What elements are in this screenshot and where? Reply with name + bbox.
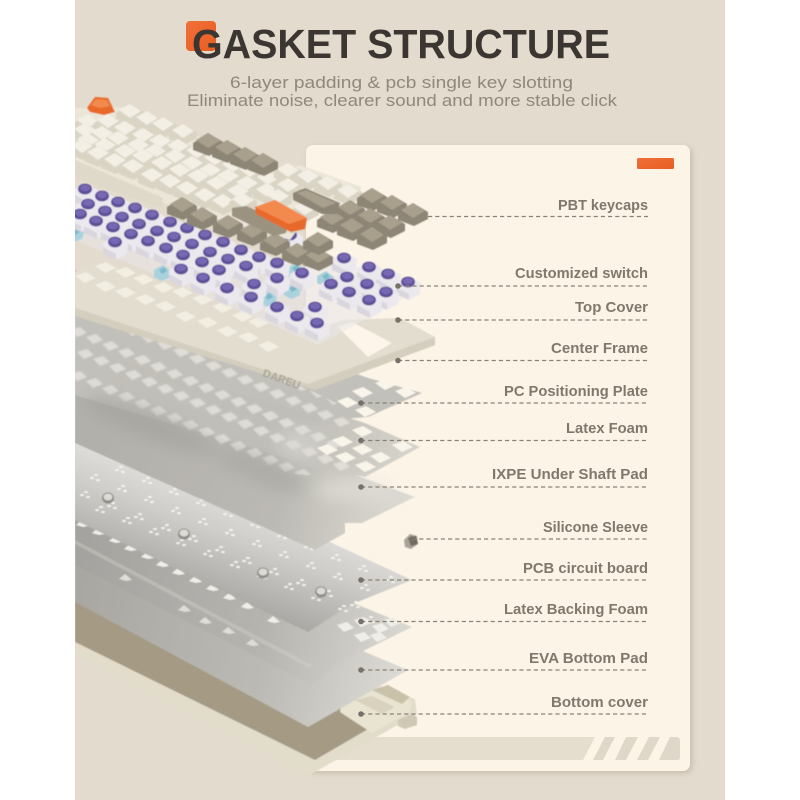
label: PCB circuit board: PCB circuit board [523, 560, 648, 577]
label: Top Cover: Top Cover [575, 299, 648, 316]
bottom stripe band [315, 737, 680, 760]
label: Latex Backing Foam: Latex Backing Foam [504, 601, 648, 618]
subtitle line 2: Eliminate noise, clearer sound and more stable click [187, 91, 618, 110]
panel: label card [306, 145, 690, 771]
subtitle line 1: 6-layer padding & pcb single key slotting [230, 73, 573, 92]
layer: customized switches [67, 183, 421, 345]
layer: PC positioning plate [75, 270, 422, 420]
label: Silicone Sleeve: Silicone Sleeve [543, 519, 648, 536]
layer: PCB circuit board [75, 443, 412, 632]
layer: latex backing foam [75, 520, 412, 652]
label: Top Cover [395, 299, 648, 323]
label: IXPE Under Shaft Pad: IXPE Under Shaft Pad [492, 466, 648, 483]
label: IXPE Under Shaft Pad [358, 466, 648, 490]
label: Latex Foam [358, 420, 648, 443]
long grey keys [232, 206, 288, 236]
label: Silicone Sleeve [409, 519, 648, 542]
label: Bottom cover [358, 694, 648, 717]
label: Bottom cover: Bottom cover [551, 694, 648, 711]
icon: silicone sleeve [404, 534, 418, 549]
layer: latex foam [75, 330, 420, 477]
plate blotches [91, 392, 376, 500]
icon: title orange square [186, 21, 216, 51]
plate square holes [75, 327, 350, 476]
plate bright right-end holes [317, 379, 416, 472]
label: Customized switch: Customized switch [515, 265, 648, 282]
label: PBT keycaps: PBT keycaps [558, 197, 648, 214]
label: EVA Bottom Pad: EVA Bottom Pad [529, 650, 648, 667]
label: EVA Bottom Pad [358, 650, 648, 673]
blue stabilizers [67, 226, 334, 307]
label: Center Frame [395, 340, 648, 363]
silicone sleeve sockets [102, 492, 327, 598]
label: Center Frame: Center Frame [551, 340, 648, 357]
title: GASKET STRUCTURE [192, 21, 610, 67]
layer: IXPE under shaft pad [75, 380, 415, 550]
label: PC Positioning Plate: PC Positioning Plate [504, 383, 648, 400]
layer: bottom cover [75, 600, 417, 776]
label: Latex Backing Foam [358, 601, 648, 624]
layer: EVA bottom pad [75, 565, 407, 728]
orange tag [637, 158, 674, 169]
label: PC Positioning Plate [358, 383, 648, 406]
orange keys [255, 200, 307, 232]
exploded keyboard illustration [67, 97, 435, 776]
label: PCB circuit board [358, 560, 648, 583]
layer: PBT keycaps [68, 97, 428, 271]
label: Customized switch [395, 265, 648, 289]
layer: center frame and top cover [75, 262, 435, 392]
frame logo: DAREU [261, 368, 302, 392]
label: Latex Foam: Latex Foam [566, 420, 648, 437]
